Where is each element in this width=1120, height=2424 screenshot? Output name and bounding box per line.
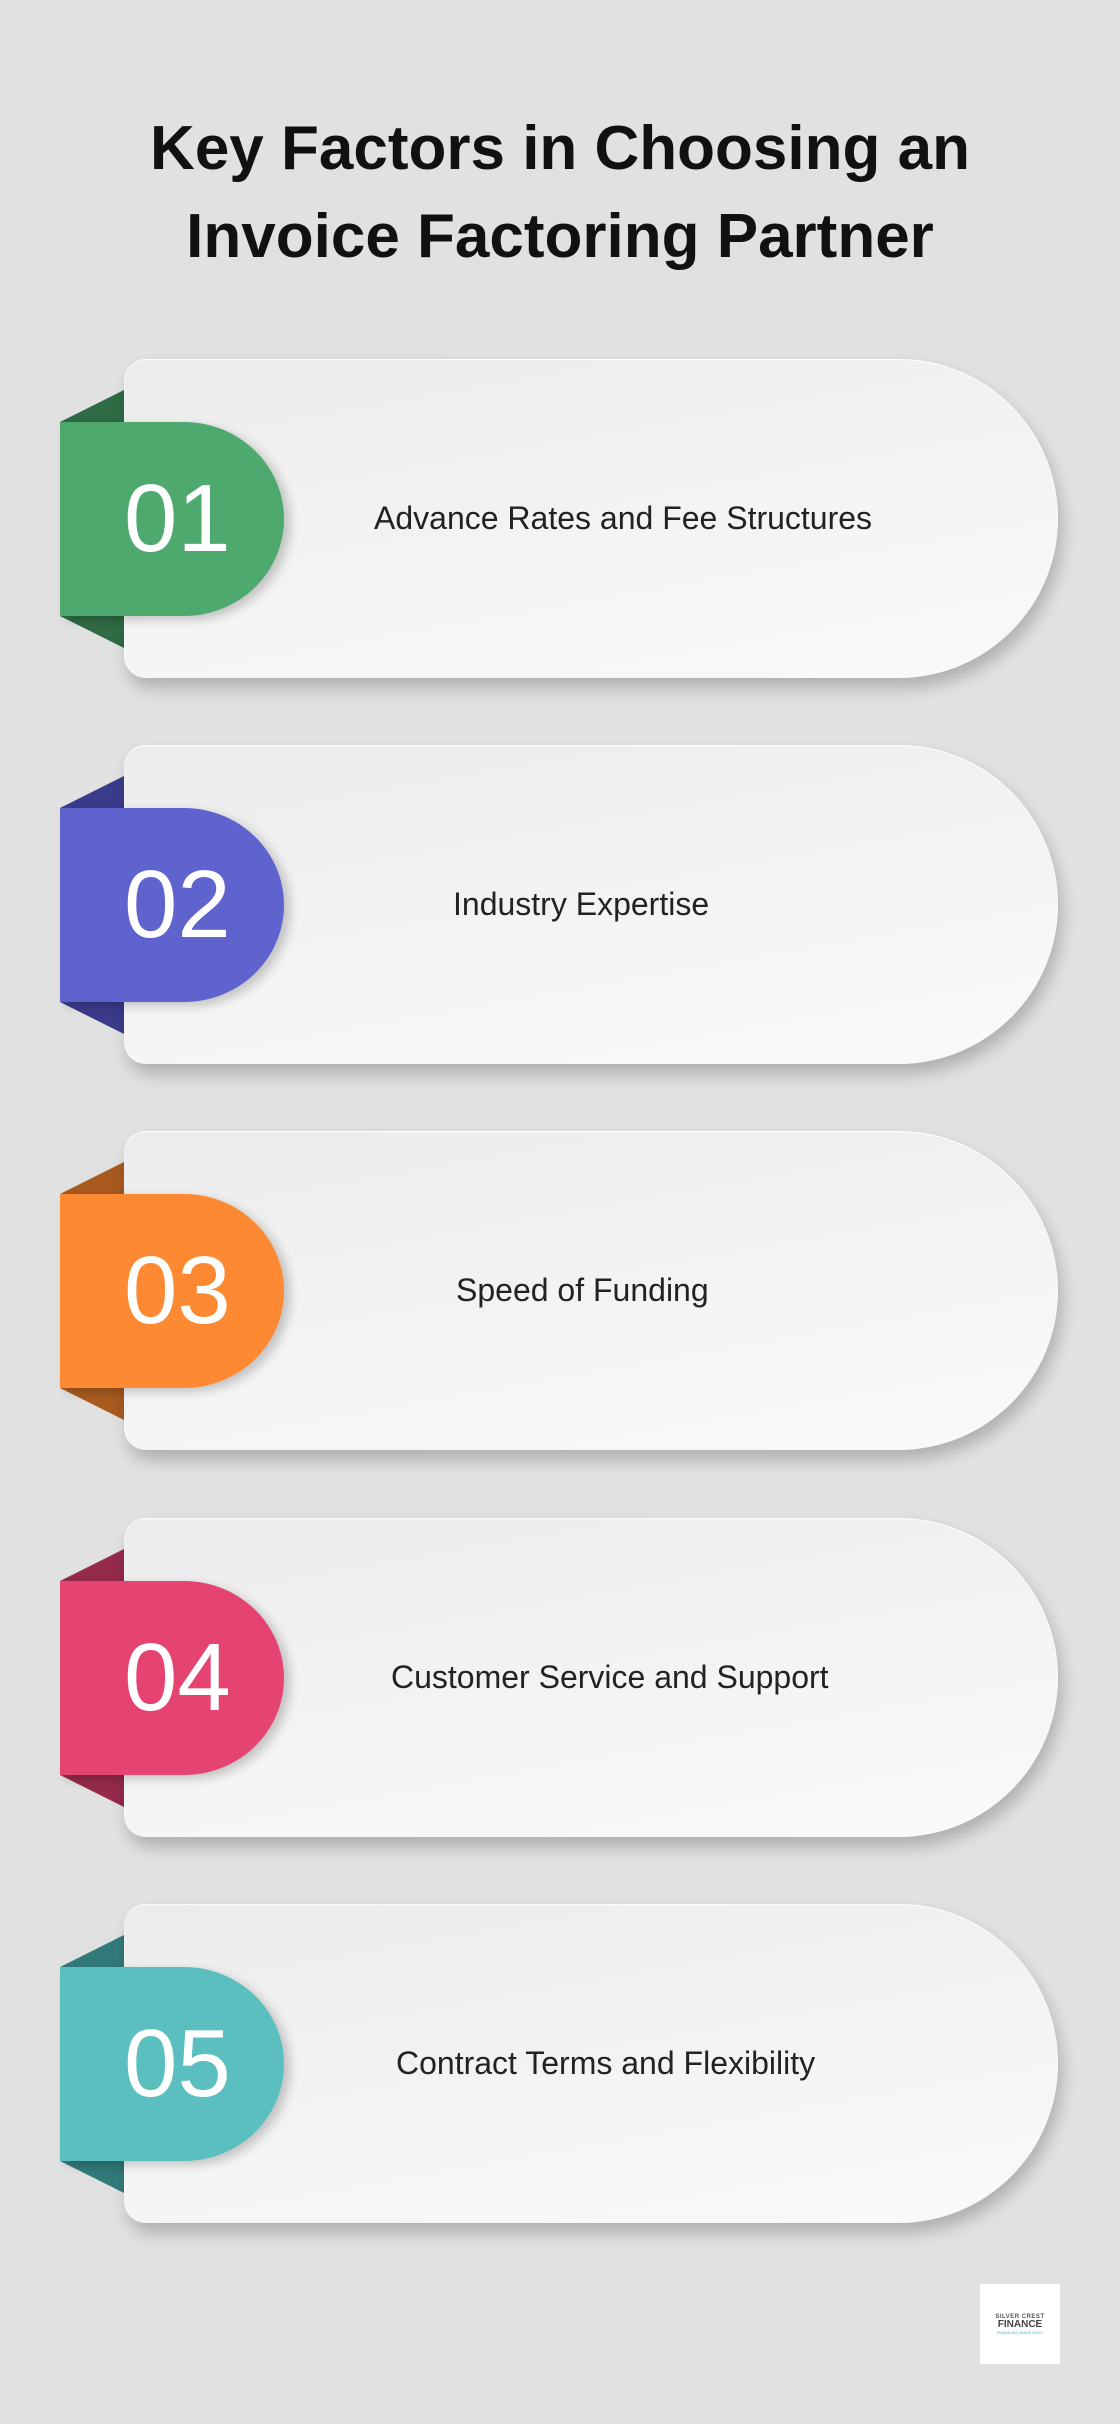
- label: Customer Service and Support: [391, 1659, 829, 1695]
- number badge: 04: [124, 1624, 231, 1731]
- number badge: [60, 1194, 284, 1388]
- number badge: 02: [124, 851, 231, 958]
- title: Invoice Factoring Partner: [186, 202, 934, 271]
- title: [150, 114, 970, 271]
- number badge: 01: [124, 465, 231, 572]
- fold bottom: [60, 616, 124, 648]
- number badge: 05: [124, 2010, 231, 2117]
- number badge: [60, 1581, 284, 1775]
- label: Speed of Funding: [456, 1272, 709, 1308]
- number badge: 03: [124, 1237, 231, 1344]
- panel: item 02: [60, 745, 1069, 1082]
- panel: item 05: [60, 1904, 1069, 2240]
- label: Contract Terms and Flexibility: [396, 2045, 815, 2081]
- fold top: [60, 1935, 124, 1967]
- logo: FINANCE: [998, 2319, 1042, 2330]
- logo: FINANCING MADE EASY: [997, 2330, 1043, 2335]
- card: [124, 1904, 1058, 2223]
- card: [124, 359, 1058, 678]
- card: [124, 1518, 1058, 1837]
- fold bottom: [60, 1775, 124, 1807]
- panel: item 01: [60, 359, 1069, 696]
- card: [124, 1131, 1058, 1450]
- number badge: [60, 808, 284, 1002]
- fold top: [60, 1549, 124, 1581]
- label: Advance Rates and Fee Structures: [374, 500, 872, 536]
- logo: SILVER CREST: [995, 2314, 1045, 2320]
- fold bottom: [60, 1388, 124, 1420]
- logo: [980, 2284, 1060, 2364]
- panel: item 04: [60, 1518, 1069, 1854]
- number badge: [60, 422, 284, 616]
- title: Key Factors in Choosing an: [150, 114, 970, 183]
- fold top: [60, 1162, 124, 1194]
- panel: item 03: [60, 1131, 1069, 1468]
- fold bottom: [60, 2161, 124, 2193]
- fold top: [60, 390, 124, 422]
- label: Industry Expertise: [453, 886, 709, 922]
- fold bottom: [60, 1002, 124, 1034]
- fold top: [60, 776, 124, 808]
- number badge: [60, 1967, 284, 2161]
- card: [124, 745, 1058, 1064]
